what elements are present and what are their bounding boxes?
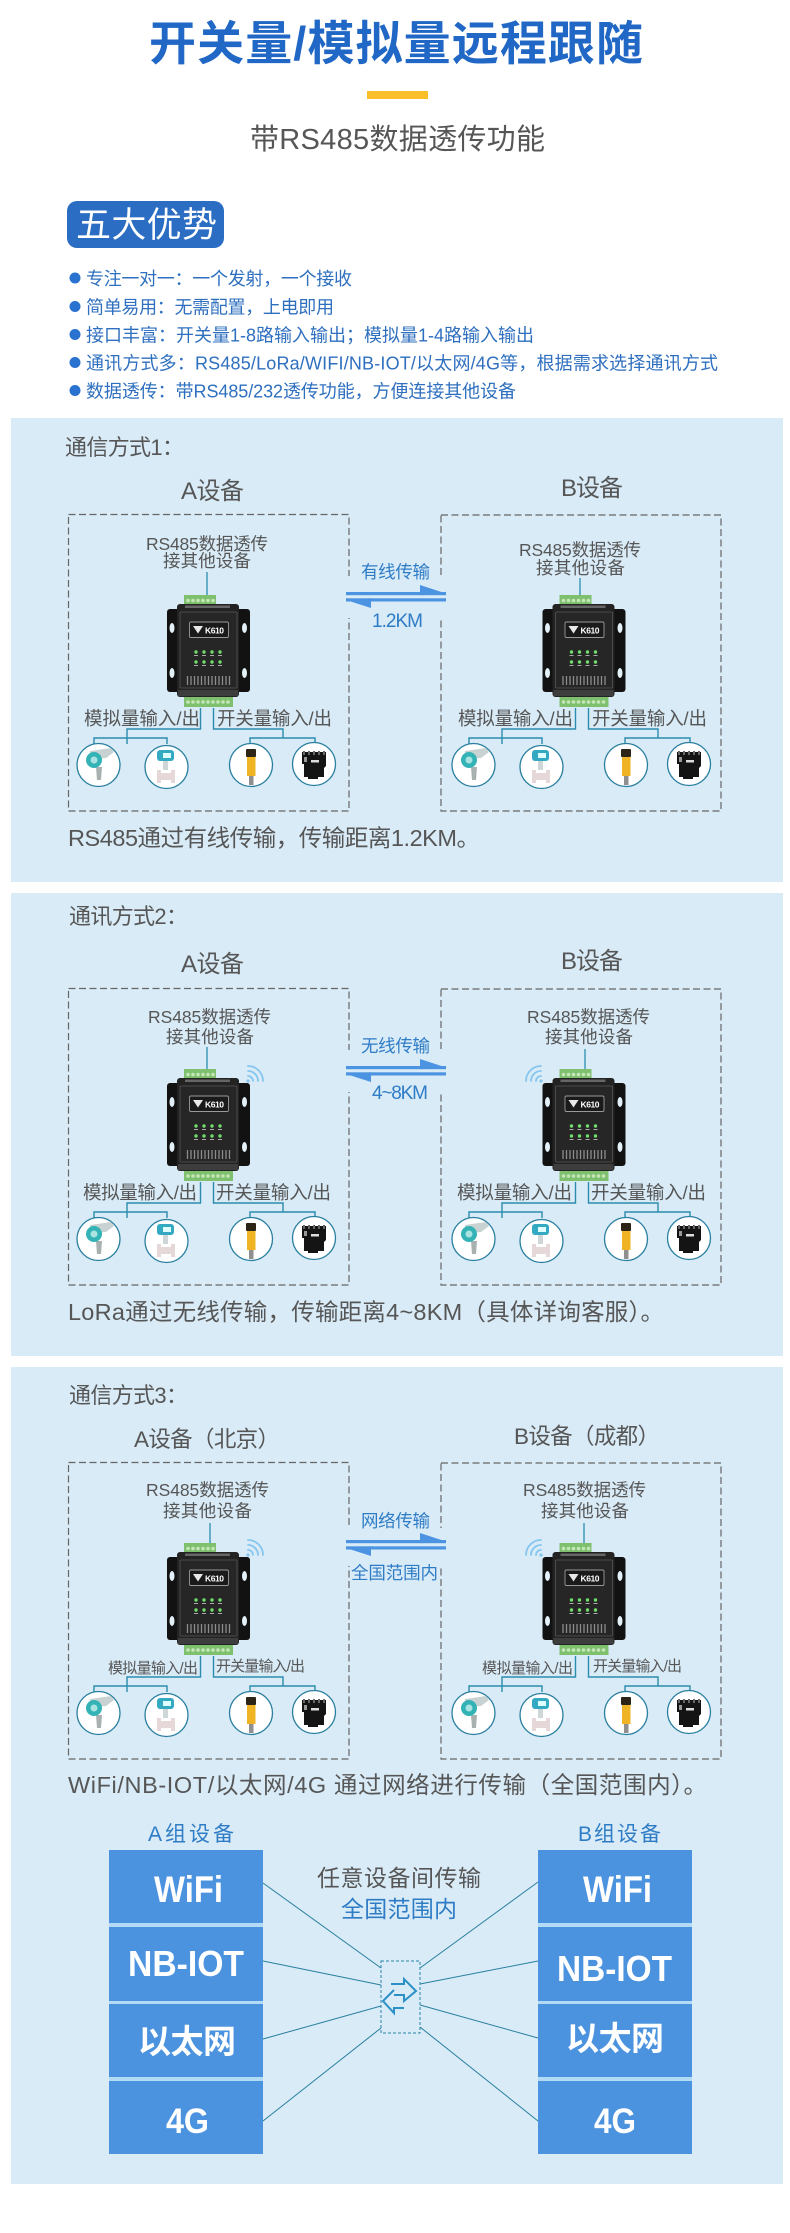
transfer arrows: network: 全国范围内: [351, 1563, 438, 1583]
network diagram: [109, 1823, 692, 2154]
device B group: RS485数据透传: [523, 1480, 646, 1500]
column: group A: NB-IOT: [128, 1943, 244, 1984]
device A group: 模拟量输入/出: [83, 1182, 197, 1203]
connection lines: [263, 1882, 538, 2121]
device B group: K610: [580, 626, 600, 636]
heading: mode 1: 通信方式1：: [65, 435, 184, 460]
caption: mode 3: WiFi/NB-IOT/以太网/4G 通过网络进行传输（全国范围内）。: [68, 1772, 707, 1798]
device B group: K610: [580, 1100, 600, 1110]
device B group: 接其他设备: [536, 558, 626, 578]
device B group: 模拟量输入/出: [482, 1660, 573, 1677]
dashed box: device A: [68, 1462, 349, 1759]
title accent bar: [367, 91, 428, 99]
heading: device A Beijing: A设备（北京）: [134, 1427, 280, 1452]
heading: mode 3: 通信方式3：: [69, 1383, 188, 1408]
column: group A: 以太网: [138, 2023, 236, 2060]
device B group: RS485数据透传: [527, 1007, 650, 1027]
device A group: RS485数据透传: [146, 534, 268, 554]
advantages list: 专注一对一：一个发射，一个接收: [86, 269, 352, 289]
device A group: 模拟量输入/出: [108, 1660, 198, 1677]
column: group B: [538, 1850, 692, 2154]
device A group: 开关量输入/出: [217, 708, 332, 729]
dashed box: device A: [68, 514, 349, 811]
advantages list: [70, 269, 718, 402]
column: group A: [109, 1850, 263, 2154]
column: group B: 4G: [594, 2102, 636, 2141]
panel: communication mode 3: [11, 1367, 783, 2184]
dashed box: device A: [68, 988, 349, 1285]
device A group: 接其他设备: [163, 551, 252, 571]
device B group: [452, 540, 710, 788]
badge: five advantages: 五大优势: [76, 206, 217, 245]
heading: group B: B组设备: [578, 1823, 661, 1846]
device B group: 接其他设备: [545, 1027, 634, 1047]
panel: communication mode 1: [11, 418, 783, 882]
device B group: [452, 1007, 710, 1262]
column: group B: NB-IOT: [557, 1948, 672, 1989]
device A group: [77, 534, 336, 788]
device A group: RS485数据透传: [146, 1480, 269, 1500]
heading: mode 2: 通讯方式2：: [69, 904, 188, 929]
heading: group A: A组设备: [148, 1823, 234, 1846]
icon: exchange arrows: [381, 1961, 420, 2033]
device A group: 接其他设备: [166, 1027, 254, 1047]
device B group: RS485数据透传: [519, 540, 641, 560]
transfer arrows: wireless: [345, 1036, 446, 1104]
device B group: K610: [580, 1574, 600, 1584]
heading: device A: A设备: [181, 951, 244, 978]
device B group: [452, 1480, 710, 1736]
column: group B: WiFi: [583, 1869, 652, 1910]
device A group: K610: [205, 626, 224, 636]
device A group: K610: [205, 1574, 224, 1584]
advantages list: 数据透传：带RS485/232透传功能，方便连接其他设备: [86, 382, 516, 402]
column: group A: 4G: [166, 2102, 209, 2141]
transfer arrows: network: [345, 1511, 446, 1583]
device B group: 开关量输入/出: [592, 708, 707, 729]
advantages list: 简单易用：无需配置，上电即用: [86, 298, 334, 318]
title: 开关量/模拟量远程跟随: [149, 17, 643, 70]
device A group: [77, 1007, 336, 1262]
column: group A: WiFi: [154, 1869, 223, 1910]
dashed box: device B: [441, 989, 721, 1285]
device A group: K610: [205, 1100, 224, 1110]
device A group: RS485数据透传: [148, 1007, 271, 1027]
advantages list: 通讯方式多：RS485/LoRa/WIFI/NB-IOT/以太网/4G等，根据需求选择通讯方式: [86, 354, 718, 374]
transfer arrows: network: 网络传输: [361, 1511, 430, 1531]
dashed box: device B: [441, 515, 721, 811]
subtitle: 带RS485数据透传功能: [250, 123, 545, 156]
caption: mode 1: RS485通过有线传输，传输距离1.2KM。: [68, 825, 480, 851]
device A group: 接其他设备: [163, 1501, 252, 1521]
device B group: 开关量输入/出: [593, 1658, 682, 1675]
advantages list: 接口丰富：开关量1-8路输入输出；模拟量1-4路输入输出: [86, 326, 534, 346]
device B group: 开关量输入/出: [591, 1182, 706, 1203]
device B group: 模拟量输入/出: [458, 708, 573, 729]
transfer arrows: wired: 有线传输: [361, 562, 430, 582]
device B group: 模拟量输入/出: [457, 1182, 572, 1203]
device A group: 开关量输入/出: [216, 1658, 305, 1675]
heading: device B: B设备: [561, 948, 623, 975]
device A group: [77, 1480, 336, 1736]
panel: communication mode 2: [11, 893, 783, 1356]
device A group: 开关量输入/出: [216, 1182, 331, 1203]
center note: [317, 1865, 481, 1922]
transfer arrows: wired: 1.2KM: [372, 611, 423, 632]
transfer arrows: wireless: 无线传输: [361, 1036, 430, 1056]
device B group: 接其他设备: [541, 1501, 630, 1521]
transfer arrows: wired: [345, 562, 446, 632]
heading: device B Chengdu: B设备（成都）: [514, 1424, 660, 1449]
center note: 全国范围内: [341, 1896, 457, 1922]
dashed box: device B: [441, 1463, 721, 1759]
center note: 任意设备间传输: [317, 1865, 481, 1891]
column: group B: 以太网: [566, 2020, 664, 2057]
device A group: 模拟量输入/出: [84, 708, 200, 729]
caption: mode 2: LoRa通过无线传输，传输距离4~8KM（具体详询客服）。: [68, 1299, 664, 1325]
heading: device A: A设备: [181, 478, 244, 505]
transfer arrows: wireless: 4~8KM: [372, 1083, 428, 1104]
heading: device B: B设备: [561, 475, 623, 502]
